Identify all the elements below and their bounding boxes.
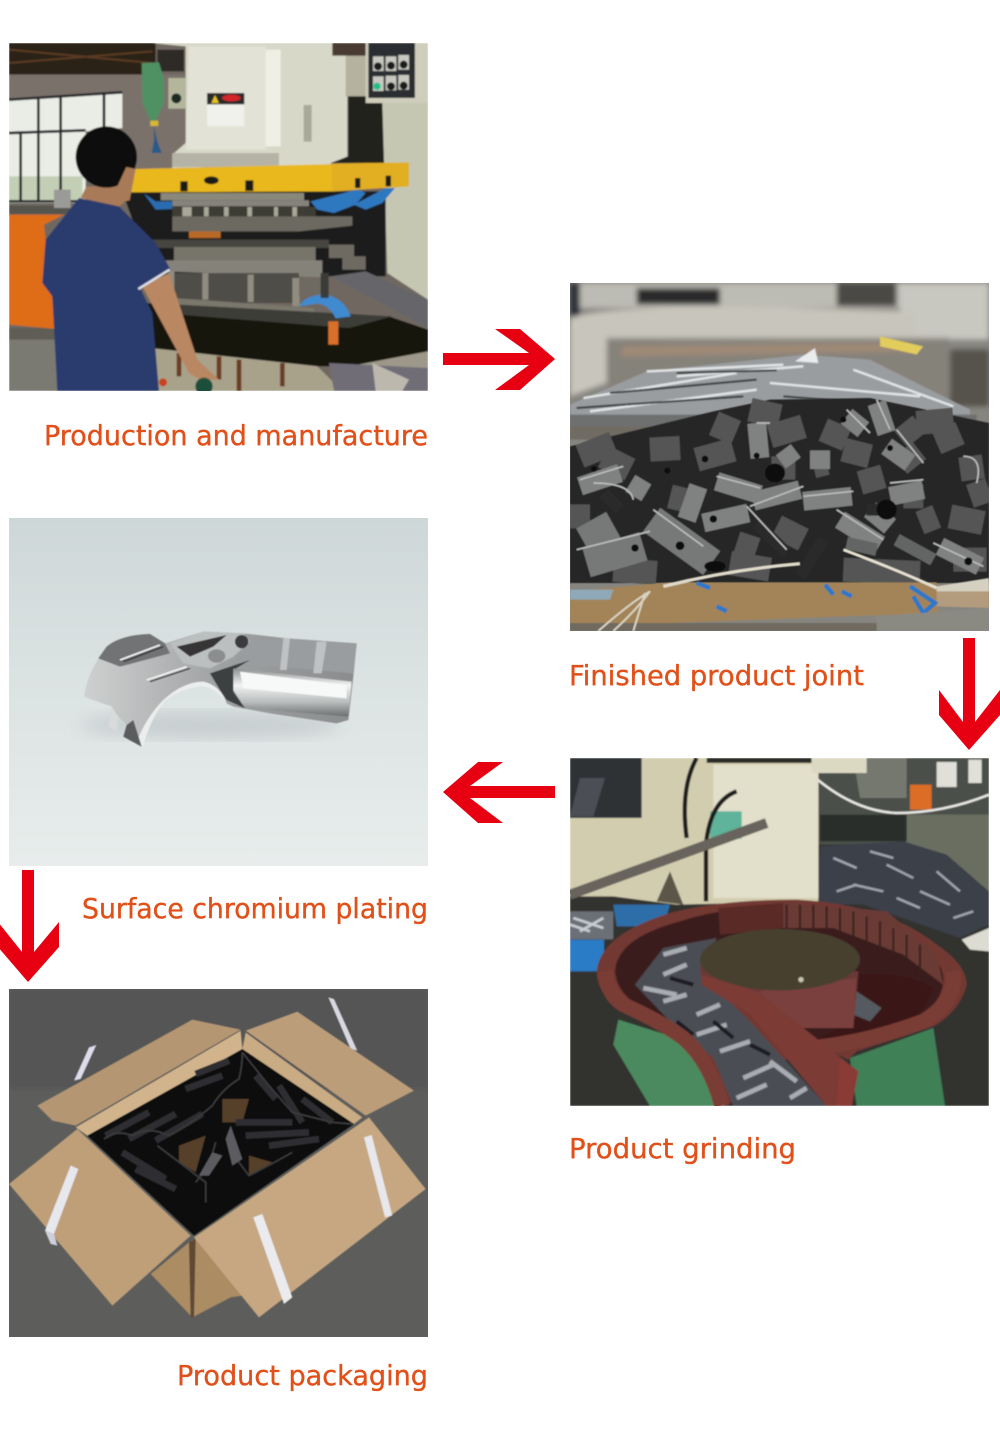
photo: surface chromium plating [9, 518, 428, 866]
green body [613, 1020, 725, 1106]
base [151, 348, 342, 391]
man arm [142, 273, 219, 390]
window [9, 92, 122, 203]
right column [382, 103, 428, 300]
photo: finished product joint [570, 283, 989, 631]
slab [331, 271, 428, 328]
arrow: down 1 [939, 638, 1000, 750]
photo: product grinding [570, 758, 989, 1106]
straps behind [74, 1045, 96, 1081]
arrow: left [443, 762, 555, 823]
warning label [207, 104, 244, 126]
bottom-right flap [194, 1117, 426, 1317]
die area [122, 191, 386, 276]
photo: production and manufacture [9, 43, 428, 395]
orange box [9, 215, 64, 329]
bottom-left flap [9, 1129, 191, 1306]
heading: product packaging: Product packaging [177, 1360, 428, 1392]
ring bands [623, 1000, 936, 1106]
blue clamps [311, 190, 366, 213]
left floor items [613, 905, 670, 926]
floor [9, 328, 55, 340]
upper right panel [346, 56, 366, 96]
icon: chrome joint [84, 632, 357, 747]
heading: finished product joint: Finished product joint [569, 660, 864, 692]
arrow: right 1 [443, 329, 555, 390]
yellow bar [131, 162, 409, 192]
cardboard edge and rope [570, 550, 989, 631]
metal parts in bowl [635, 938, 827, 1106]
photo: product packaging [9, 989, 428, 1337]
arrow: down 2 [0, 870, 59, 982]
divider [702, 975, 858, 1106]
man face [117, 167, 136, 202]
white straps [45, 1166, 78, 1234]
parts pile [570, 398, 989, 583]
background factory [818, 758, 989, 845]
heading: surface chromium plating: Surface chromium plating [82, 893, 428, 925]
wall [570, 758, 818, 905]
heading: product grinding: Product grinding [569, 1133, 796, 1165]
box flaps [37, 1020, 241, 1126]
inner walls [76, 1031, 242, 1136]
bottle [142, 62, 164, 121]
centre hub [700, 964, 859, 1012]
heading: production and manufacture: Production and manufacture [44, 420, 428, 452]
scrap pile [818, 841, 989, 938]
press machine body [152, 43, 347, 168]
black tray [87, 1049, 354, 1236]
lower box [151, 1239, 242, 1317]
man shirt [42, 198, 171, 391]
plastic wrap over rack [570, 336, 977, 440]
grinder ring [597, 900, 967, 1106]
man neck [81, 186, 124, 206]
